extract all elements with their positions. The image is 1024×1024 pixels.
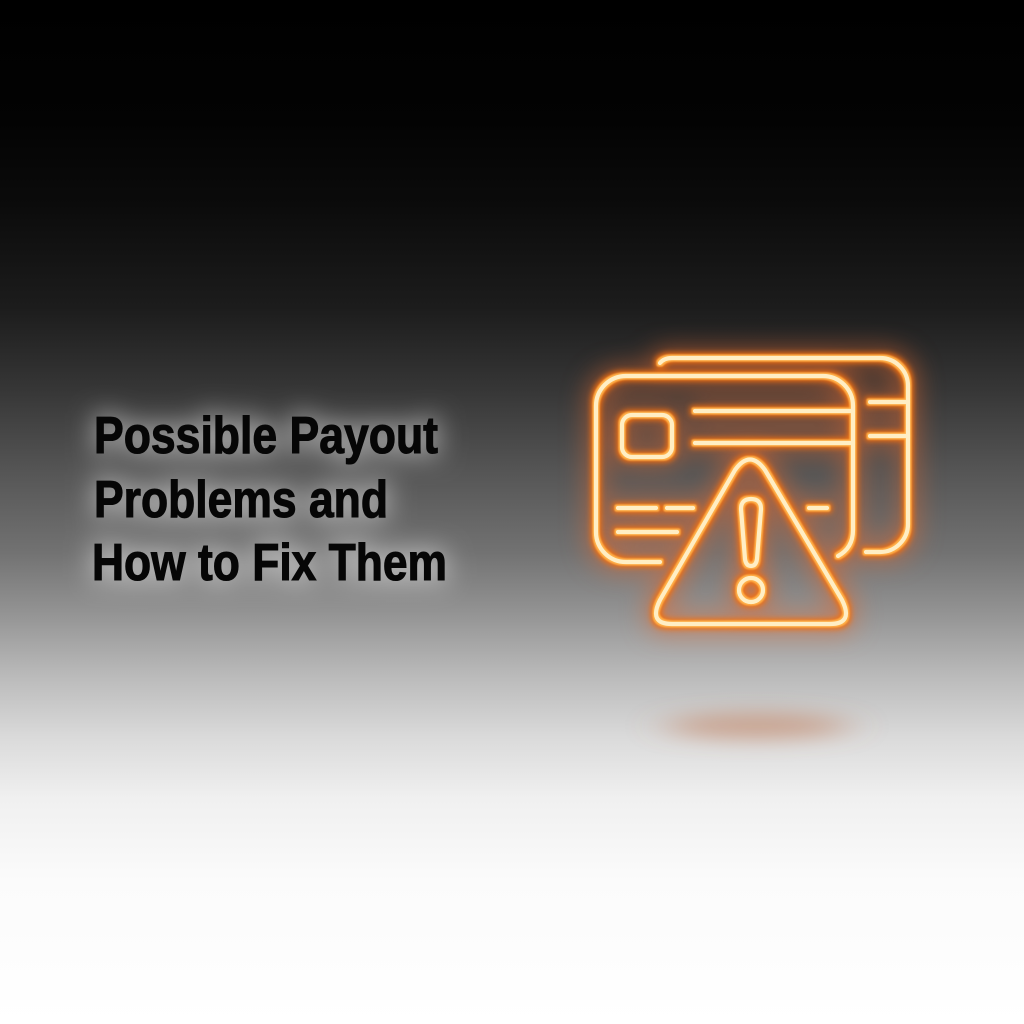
back card: [660, 358, 908, 552]
title with soft halo: Possible Payout: [94, 407, 438, 465]
front card: [596, 376, 853, 562]
title with soft halo: How to Fix Them: [92, 534, 447, 592]
title with soft halo: Problems and: [94, 471, 388, 529]
floating icon shadow: [665, 713, 849, 739]
title with soft halo: How to Fix Them: [92, 534, 447, 592]
title with soft halo: Possible Payout: [94, 407, 438, 465]
title with soft halo: [92, 407, 447, 592]
warning triangle: [656, 460, 846, 624]
icon: neon credit cards with warning triangle: [596, 358, 908, 624]
title with soft halo: Problems and: [94, 471, 388, 529]
